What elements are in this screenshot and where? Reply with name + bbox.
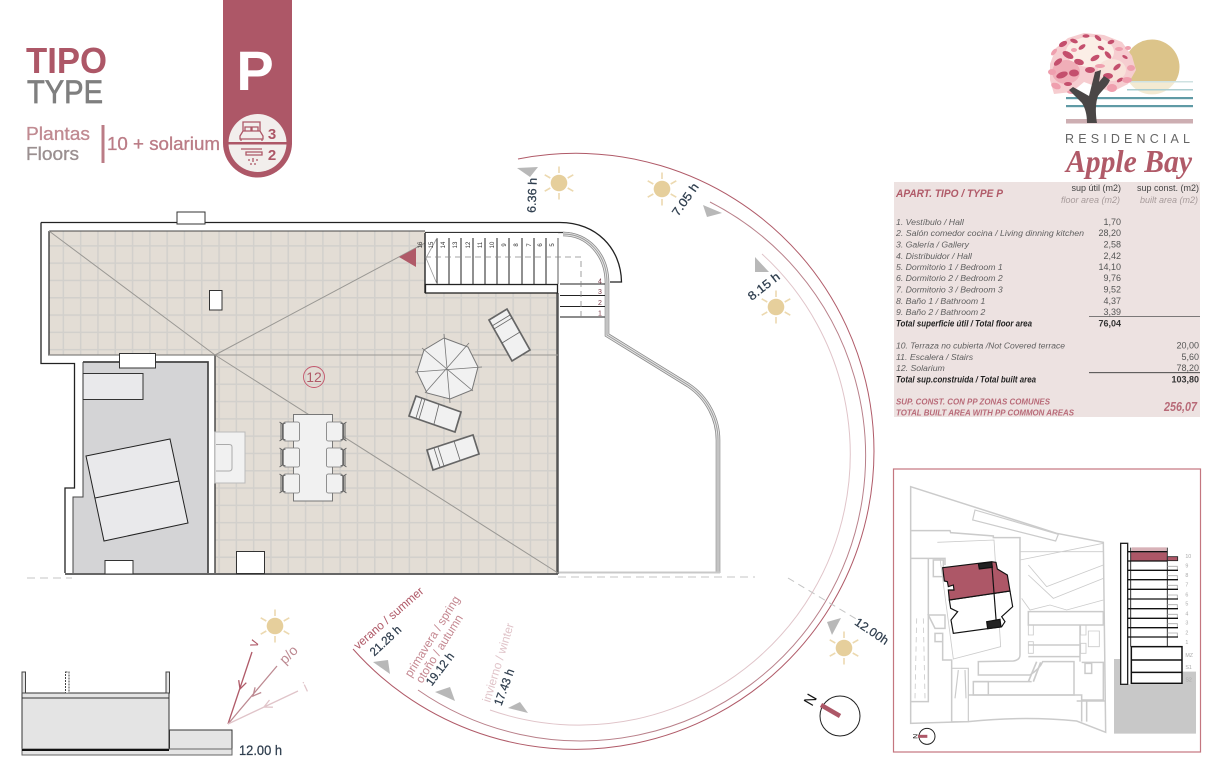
floor area rows: 1,70: [1103, 217, 1121, 227]
step numbers: [418, 241, 602, 318]
room label 12: 12: [306, 369, 322, 385]
step numbers: 15: [429, 241, 435, 248]
dining table with chairs: [280, 414, 346, 501]
floor area rows: 7. Dormitorio 3 / Bedroom 3: [896, 284, 1003, 294]
floor area rows: 1. Vestíbulo / Hall: [896, 217, 965, 227]
floor area rows: 3,39: [1103, 307, 1121, 317]
solar panels: [86, 439, 188, 541]
floor numbers: MZ: [1185, 653, 1194, 659]
site plan and building section: [911, 487, 1196, 744]
step numbers: 12: [466, 241, 472, 248]
step numbers: 7: [527, 243, 533, 247]
floor numbers: 8: [1185, 573, 1188, 579]
parasol: [415, 334, 482, 403]
floor area rows: 8. Baño 1 / Bathroom 1: [896, 296, 986, 306]
sunrise and sunset hours: 19.12 h: [423, 650, 457, 688]
site plan outline: [911, 487, 1106, 732]
roof ridge lines: [49, 231, 558, 573]
title: tipo / type: TIPO: [26, 40, 107, 81]
sunrise and sunset hours: [367, 178, 891, 707]
floor numbers: 4: [1185, 611, 1188, 617]
step numbers: 9: [502, 243, 508, 247]
floor area rows: 9,76: [1103, 273, 1121, 283]
floor area rows: 4,37: [1103, 296, 1121, 306]
floor area rows: 9. Baño 2 / Bathroom 2: [896, 307, 986, 317]
floor numbers: [1185, 554, 1194, 683]
floors label: Floors: [26, 144, 79, 164]
logo horizon stripes: [1066, 81, 1193, 124]
icon: bed: [240, 122, 263, 141]
floor area rows: 3. Galería / Gallery: [896, 240, 970, 250]
floor area rows: 14,10: [1098, 262, 1121, 272]
floors label: 10 + solarium: [107, 134, 220, 154]
sun lounger 3: [489, 309, 530, 361]
common areas total: 256,07: [1163, 399, 1198, 414]
floor numbers: 9: [1185, 563, 1188, 569]
table heading: floor area (m2): [1061, 195, 1120, 205]
season labels: otoño / autumn: [413, 612, 466, 686]
built area rows: 78,20: [1176, 363, 1199, 373]
small compass: N: [913, 734, 920, 739]
sun lounger 1: [409, 396, 461, 432]
area table panel: [894, 182, 1200, 418]
icon: shower: [241, 149, 262, 165]
sunrise and sunset hours: 17.43 h: [491, 667, 517, 707]
step numbers: 3: [598, 289, 602, 296]
building section: [1114, 659, 1196, 734]
floor numbers: 10: [1185, 554, 1191, 560]
sun direction triangles: [373, 167, 841, 713]
sunrise and sunset hours: 6.36 h: [525, 178, 540, 213]
built area rows: 10. Terraza no cubierta /Not Covered terrace: [896, 340, 1065, 350]
floor area rows: 76,04: [1098, 318, 1121, 328]
step numbers: 11: [478, 241, 484, 248]
floor area rows: 28,20: [1098, 228, 1121, 238]
floors label: [26, 124, 220, 164]
sunrise and sunset hours: 7.05 h: [669, 180, 702, 219]
season labels: primavera / spring: [402, 593, 463, 680]
floor area rows: [895, 217, 1200, 328]
floor area rows: Total superficie útil / Total floor area: [896, 318, 1032, 328]
logo text: RESIDENCIAL: [1065, 132, 1190, 146]
floor numbers: S2: [1185, 677, 1192, 683]
step numbers: 6: [538, 243, 544, 247]
logo blossom: [1048, 33, 1136, 94]
step numbers: 1: [598, 310, 602, 318]
floor numbers: 2: [1185, 630, 1188, 636]
sun path arcs: [353, 153, 874, 749]
step numbers: 14: [441, 241, 447, 248]
logo: Residencial Apple Bay: [1048, 33, 1193, 179]
type badge P: 2: [268, 147, 276, 164]
floor area rows: 2,42: [1103, 251, 1121, 261]
floor area rows: 6. Dormitorio 2 / Bedroom 2: [896, 273, 1003, 283]
sun markers: [261, 166, 858, 664]
sunrise and sunset hours: 8.15 h: [745, 270, 783, 303]
built area rows: 12. Solarium: [896, 363, 945, 373]
common areas total: [896, 396, 1198, 418]
type badge P: 3: [268, 126, 276, 143]
small compass: [913, 728, 935, 744]
covered grey roof: [73, 362, 208, 573]
table heading: APART. TIPO / TYPE P: [895, 188, 1004, 200]
common areas total: TOTAL BUILT AREA WITH PP COMMON AREAS: [896, 408, 1074, 418]
floor numbers: 1: [1185, 640, 1188, 646]
step numbers: 2: [598, 300, 602, 307]
step numbers: 10: [490, 241, 496, 248]
built area rows: 11. Escalera / Stairs: [896, 352, 974, 362]
floor numbers: 3: [1185, 620, 1188, 626]
season labels: invierno / winter: [479, 621, 517, 704]
floor numbers: S1: [1185, 665, 1192, 671]
sunrise and sunset hours: 12.00h: [852, 615, 891, 648]
right terrace triple wall: [559, 234, 720, 573]
type badge P: P: [236, 39, 274, 102]
sun angle arrows: i: [301, 679, 310, 695]
floor area rows: 5. Dormitorio 1 / Bedroom 1: [896, 262, 1003, 272]
floors label: Plantas: [26, 124, 90, 144]
highlighted apartment footprint: [943, 562, 1013, 633]
sunrise and sunset hours: 21.28 h: [367, 623, 404, 659]
entrance arrow: [399, 248, 416, 267]
sun angle arrows: [228, 637, 310, 724]
floor numbers: 6: [1185, 592, 1188, 598]
floor numbers: 7: [1185, 582, 1188, 588]
table heading: sup const. (m2): [1137, 183, 1199, 193]
compass: [801, 691, 860, 736]
stairs: [418, 233, 605, 318]
built area rows: 5,60: [1181, 352, 1199, 362]
step numbers: 8: [514, 243, 520, 247]
logo sun: [1124, 40, 1180, 94]
roof equipment: [83, 374, 143, 400]
step numbers: 16: [418, 241, 424, 248]
floor numbers: 5: [1185, 601, 1188, 607]
step numbers: 4: [598, 278, 602, 286]
step numbers: 5: [550, 243, 556, 247]
floor area rows: 2. Salón comedor cocina / Living dinning kitchen: [895, 228, 1084, 238]
section drawing: 12.00 h: [239, 743, 282, 758]
floor plan: [27, 212, 755, 578]
sun angle arrows: v: [245, 637, 262, 649]
built area rows: [896, 340, 1200, 384]
floor area rows: 2,58: [1103, 240, 1121, 250]
barbecue counter: [215, 432, 245, 483]
common areas total: SUP. CONST. CON PP ZONAS COMUNES: [896, 396, 1050, 406]
compass: N: [801, 691, 821, 709]
location panel: [894, 469, 1200, 752]
outer walls: [41, 222, 622, 574]
season labels: [351, 584, 517, 704]
built area rows: Total sup.construida / Total built area: [896, 374, 1036, 384]
wall openings: [105, 212, 264, 574]
type badge P: [223, 0, 292, 178]
room label 12: [304, 366, 324, 388]
table heading: [895, 183, 1199, 205]
logo: Residencial Apple Bay: Apple Bay: [1064, 143, 1193, 179]
built area rows: 103,80: [1171, 374, 1199, 384]
dashed reference lines: [27, 577, 755, 578]
title: tipo / type: TYPE: [27, 74, 103, 110]
section drawing: [22, 672, 282, 758]
sun angle arrows: p/o: [276, 642, 301, 667]
step numbers: 13: [453, 241, 459, 248]
built area rows: 20,00: [1176, 340, 1199, 350]
title: tipo / type: [26, 40, 107, 110]
solarium tiled terrace: [49, 231, 558, 573]
table heading: sup útil (m2): [1071, 183, 1121, 193]
table heading: built area (m2): [1140, 195, 1198, 205]
season labels: verano / summer: [351, 584, 426, 652]
floor area rows: 9,52: [1103, 284, 1121, 294]
floor area rows: 4. Distribuidor / Hall: [896, 251, 973, 261]
sun lounger 2: [427, 435, 479, 470]
logo tree trunk: [1069, 70, 1110, 123]
